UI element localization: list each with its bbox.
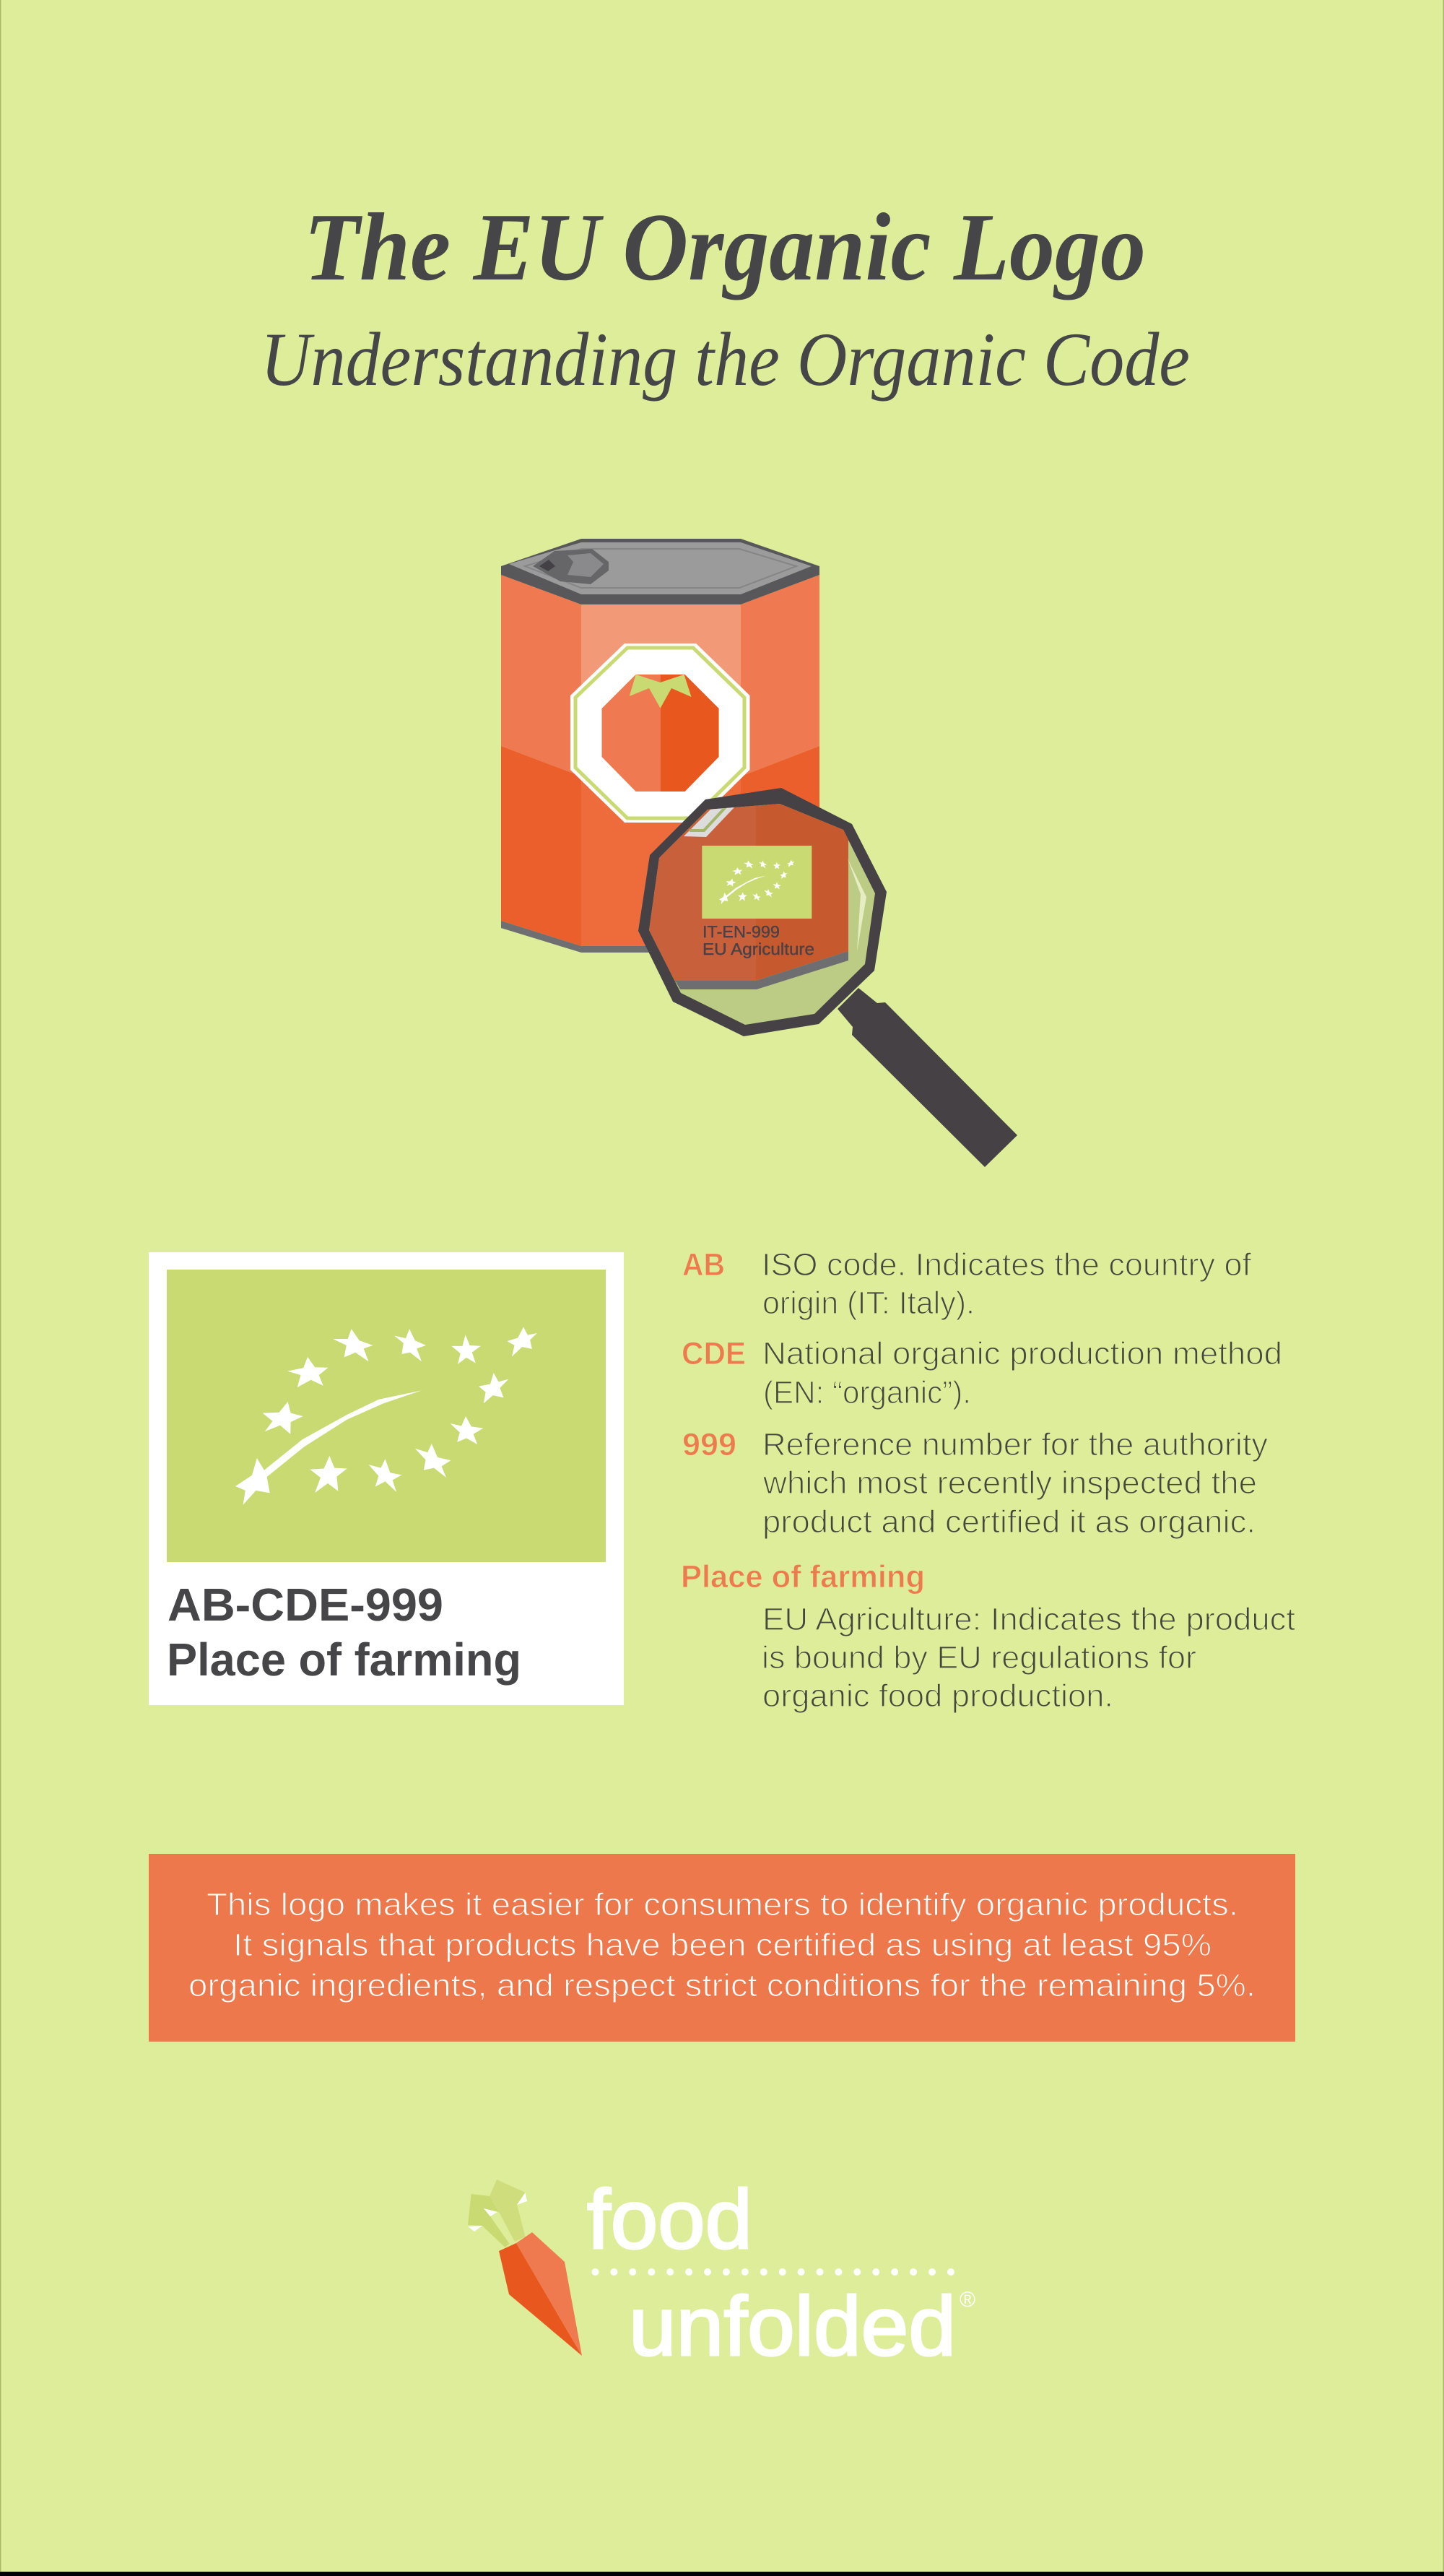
explanation: 999: 999 — [682, 1427, 736, 1462]
explanation: AB — [682, 1247, 1252, 1321]
explanation: AB: AB — [682, 1247, 725, 1283]
magnifying glass lens — [638, 788, 887, 1036]
explanation: place of farming: Place of farming — [681, 1559, 925, 1595]
callout banner — [149, 1854, 1295, 2042]
explanation: CDE: National organic production method — [762, 1336, 1282, 1371]
explanation: 999: which most recently inspected the — [762, 1465, 1257, 1501]
callout banner: organic ingredients, and respect strict conditions for the remaining 5%. — [188, 1968, 1256, 2003]
title: The EU Organic Logo — [304, 194, 1146, 300]
explanation: 999: Reference number for the authority — [762, 1427, 1268, 1462]
registered mark: ® — [960, 2288, 975, 2312]
explanation: AB: origin (IT: Italy). — [762, 1285, 975, 1321]
magnified organic logo — [702, 846, 812, 919]
panel: EU organic logo card — [149, 1252, 624, 1705]
code text: AB-CDE-999 — [168, 1579, 443, 1631]
explanation: place of farming — [681, 1559, 1295, 1714]
explanation: place of farming: EU Agriculture: Indicates the product — [762, 1602, 1295, 1637]
magnified can and code — [643, 794, 848, 989]
explanation: 999 — [682, 1427, 1268, 1540]
callout banner: It signals that products have been certified as using at least 95% — [233, 1927, 1212, 1963]
magnified code text: IT-EN-999 — [703, 922, 780, 941]
place of farming text: Place of farming — [167, 1634, 521, 1686]
explanation: CDE: CDE — [682, 1336, 746, 1371]
callout banner: This logo makes it easier for consumers to identify organic products. — [206, 1887, 1238, 1922]
brand logo: food unfolded — [468, 2172, 975, 2373]
lens highlight — [848, 859, 866, 951]
explanation: 999: product and certified it as organic. — [762, 1504, 1256, 1540]
explanation: place of farming: organic food production. — [762, 1678, 1113, 1714]
illustration: tomato can under magnifying glass — [501, 539, 1017, 1167]
can body — [501, 575, 819, 953]
dotted divider — [592, 2268, 954, 2276]
explanation: CDE — [682, 1336, 1282, 1410]
explanation: AB: ISO code. Indicates the country of — [762, 1247, 1252, 1283]
wordmark: food: food — [587, 2172, 752, 2266]
explanation: CDE: (EN: “organic”). — [763, 1375, 971, 1410]
can lid — [501, 539, 819, 604]
magnified can and code: EU Agriculture — [703, 940, 814, 958]
subtitle: Understanding the Organic Code — [261, 317, 1190, 402]
magnifying glass handle — [838, 988, 1017, 1167]
EU leaf logo — [167, 1270, 606, 1562]
explanation: place of farming: is bound by EU regulations for — [762, 1640, 1196, 1675]
can label: tomato — [570, 643, 749, 823]
icon: carrot — [468, 2180, 582, 2356]
wordmark: unfolded: unfolded — [629, 2279, 956, 2373]
